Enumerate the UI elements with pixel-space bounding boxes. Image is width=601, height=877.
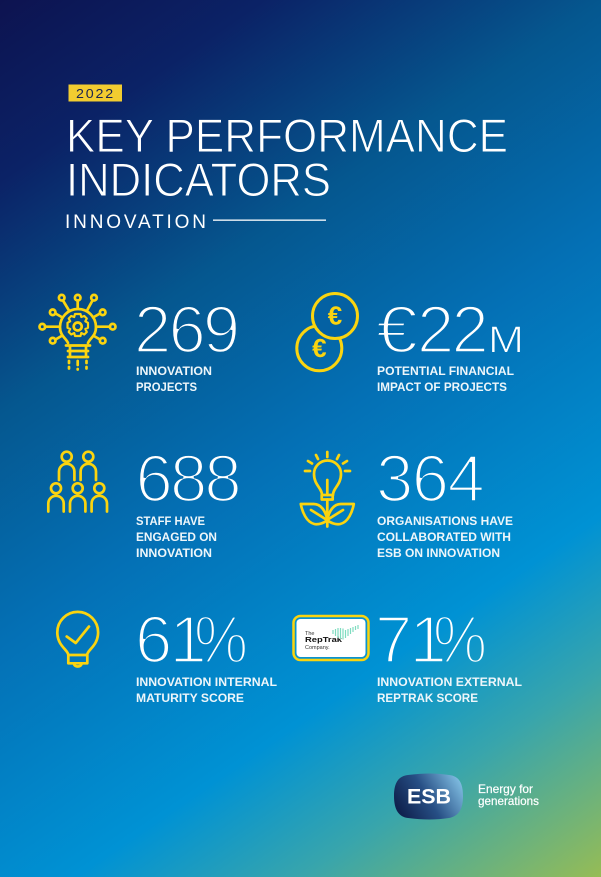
value: 71%: 71 [375,602,444,678]
icon: lightbulb with gear and network [40,295,115,370]
label: innovation projects: INNOVATION [136,364,212,378]
label: innovation external reptrak score: REPTRAK SCORE [377,691,478,705]
title: INDICATORS [66,154,331,207]
label: staff have engaged on innovation: INNOVATION [136,546,212,560]
value: €22M: 22 [417,292,486,368]
icon: euro coins: € [328,300,342,330]
icon: euro coins [297,294,358,371]
icon: lightbulb with check [57,612,98,666]
kpi: potential financial impact [297,292,524,394]
icon: group of people [48,452,107,512]
label: staff have engaged on innovation: STAFF HAVE [136,514,205,528]
icon: reptrak logo: RepTrak [305,637,342,644]
label: organisations have collaborated: COLLABORATED WITH [377,530,511,544]
label: organisations have collaborated: ORGANISATIONS HAVE [377,514,513,528]
label: organisations have collaborated: ESB ON INNOVATION [377,546,500,560]
kpi: organisations collaborated [301,442,513,560]
value: 364: 364 [376,442,484,516]
esb logo: ESB [407,786,451,808]
year badge [68,84,122,102]
label: innovation projects: PROJECTS [136,380,197,394]
value: 61%: % [194,602,248,678]
tagline [478,782,539,808]
icon: reptrak logo [294,616,368,660]
title: KEY PERFORMANCE [66,110,508,163]
kpi: staff engaged [48,442,239,560]
icon: reptrak logo: The [305,631,314,637]
label: potential financial impact of projects: IMPACT OF PROJECTS [377,380,507,394]
value: 61%: 61 [135,602,204,678]
value: 71%: % [433,602,487,678]
label: innovation internal maturity score: INNOVATION INTERNAL [136,675,277,689]
value: 269: 269 [134,292,238,368]
value: €22M: M [488,320,524,362]
value: €22M: € [376,292,418,368]
esb logo [394,774,463,820]
value: 688: 688 [136,442,239,516]
icon: euro coins: € [312,333,327,363]
icon: reptrak logo: Company. [305,645,330,651]
kpi: innovation projects [40,292,238,394]
kpi: external reptrak score [294,602,522,705]
tagline: Energy for [478,782,533,796]
label: innovation internal maturity score: MATURITY SCORE [136,691,244,705]
tagline: generations [478,794,539,808]
kpi: internal maturity score [57,602,277,705]
label: innovation external reptrak score: INNOVATION EXTERNAL [377,675,522,689]
label: potential financial impact of projects: POTENTIAL FINANCIAL [377,364,514,378]
year badge: 2022 [76,87,115,101]
subtitle: innovation: INNOVATION [65,212,206,233]
label: staff have engaged on innovation: ENGAGED ON [136,530,217,544]
title [66,110,508,207]
icon: lightbulb plant [301,452,354,526]
